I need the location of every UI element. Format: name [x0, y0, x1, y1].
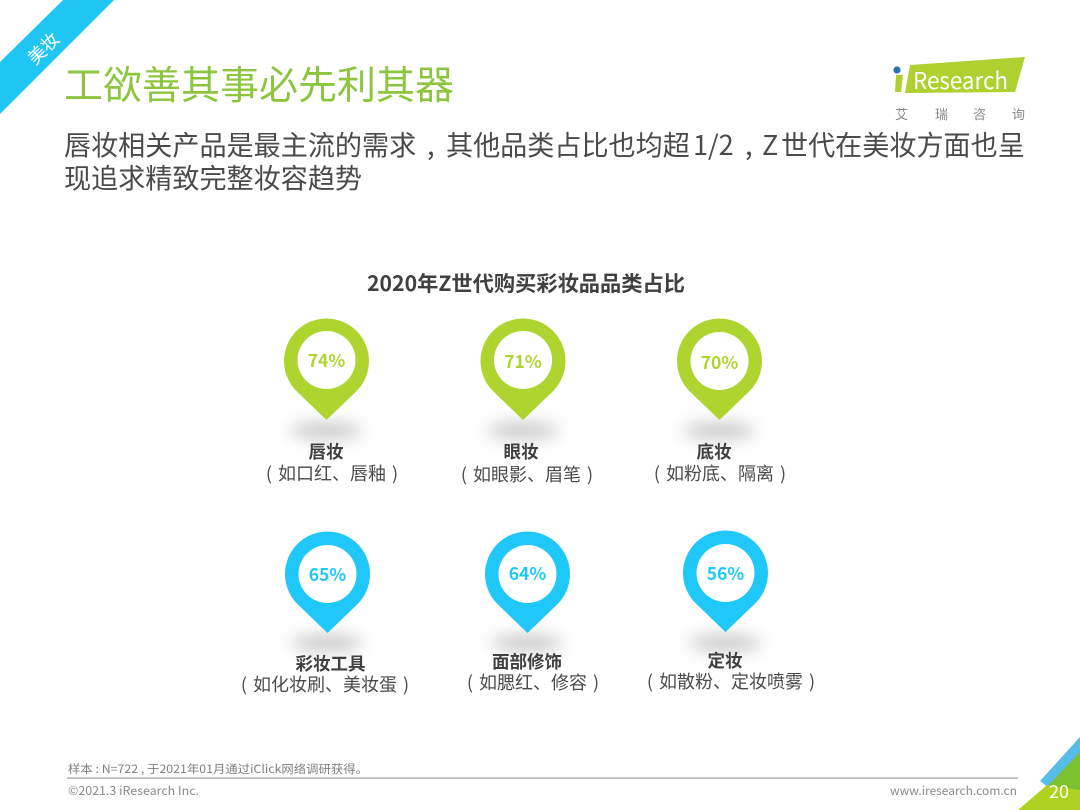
subtitle: 1/2	[693, 124, 734, 163]
pin: 底妆 70%: 70%	[701, 350, 738, 375]
pin: 彩妆工具 65%: ( 如化妆刷、美妆蛋 )	[241, 671, 409, 697]
pin: 眼妆 71%: 眼妆	[504, 439, 539, 464]
subtitle: ,	[745, 124, 753, 163]
pin: 底妆 70%: 底妆	[696, 439, 732, 464]
logo: iResearch: 询	[1012, 104, 1025, 123]
subtitle: 世代在美妆方面也呈	[781, 124, 1025, 163]
footnote: sample: 样本 : N=722 , 于2021年01月通过iClick网络调研获得。	[68, 761, 368, 777]
pin: 定妆 56%: ( 如散粉、定妆喷雾 )	[647, 668, 815, 694]
pin: 唇妆 74%	[266, 319, 398, 486]
subtitle: 现追求精致完整妆容趋势	[64, 157, 362, 196]
pin: 唇妆 74%: 74%	[308, 348, 345, 373]
pin: 面部修饰 64%: ( 如腮红、修容 )	[467, 669, 599, 695]
pin: 底妆 70%	[654, 319, 786, 486]
pin: 定妆 56%: 定妆	[708, 648, 743, 673]
logo: iResearch: 咨	[973, 104, 986, 123]
logo: iResearch: Research	[913, 62, 1008, 96]
pin: 眼妆 71%: ( 如眼影、眉笔 )	[461, 461, 593, 487]
corner ribbon: 美妆	[0, 0, 114, 114]
pin: 面部修饰 64%	[467, 532, 599, 695]
title: 工欲善其事必先利其器	[64, 55, 454, 111]
pin: 定妆 56%	[647, 531, 815, 694]
copyright: ©2021.3 iResearch Inc.	[68, 782, 199, 799]
subtitle	[64, 124, 1025, 196]
pin: 唇妆 74%: 唇妆	[308, 439, 344, 464]
pin: 唇妆 74%: ( 如口红、唇釉 )	[266, 460, 398, 486]
pin: 面部修饰 64%: 面部修饰	[492, 649, 562, 674]
pin: 定妆 56%: 56%	[707, 561, 744, 586]
logo: iResearch: 瑞	[935, 104, 948, 123]
logo: iResearch: 艾	[895, 104, 908, 123]
subtitle: Z	[762, 124, 778, 163]
corner decoration and page number	[1018, 737, 1080, 810]
subtitle: ,	[427, 124, 435, 163]
pin: 眼妆 71%	[461, 319, 593, 487]
corner decoration and page number: 20	[1049, 778, 1069, 804]
chart heading: 2020年Z世代购买彩妆品品类占比	[367, 268, 685, 298]
subtitle: 其他品类占比也均超	[446, 124, 690, 163]
pin: 底妆 70%: ( 如粉底、隔离 )	[654, 460, 786, 486]
footer rule	[67, 778, 1018, 779]
pin: 面部修饰 64%: 64%	[509, 561, 546, 586]
pin: 彩妆工具 65%	[241, 532, 409, 697]
logo: iResearch	[893, 57, 1025, 123]
pin: 彩妆工具 65%: 65%	[309, 562, 346, 587]
pin: 彩妆工具 65%: 彩妆工具	[296, 651, 366, 676]
subtitle: 唇妆相关产品是最主流的需求	[64, 124, 416, 163]
corner ribbon: 美妆: 美妆	[21, 26, 65, 70]
website: www.iresearch.com.cn	[890, 782, 1017, 799]
pin: 眼妆 71%: 71%	[504, 349, 542, 374]
